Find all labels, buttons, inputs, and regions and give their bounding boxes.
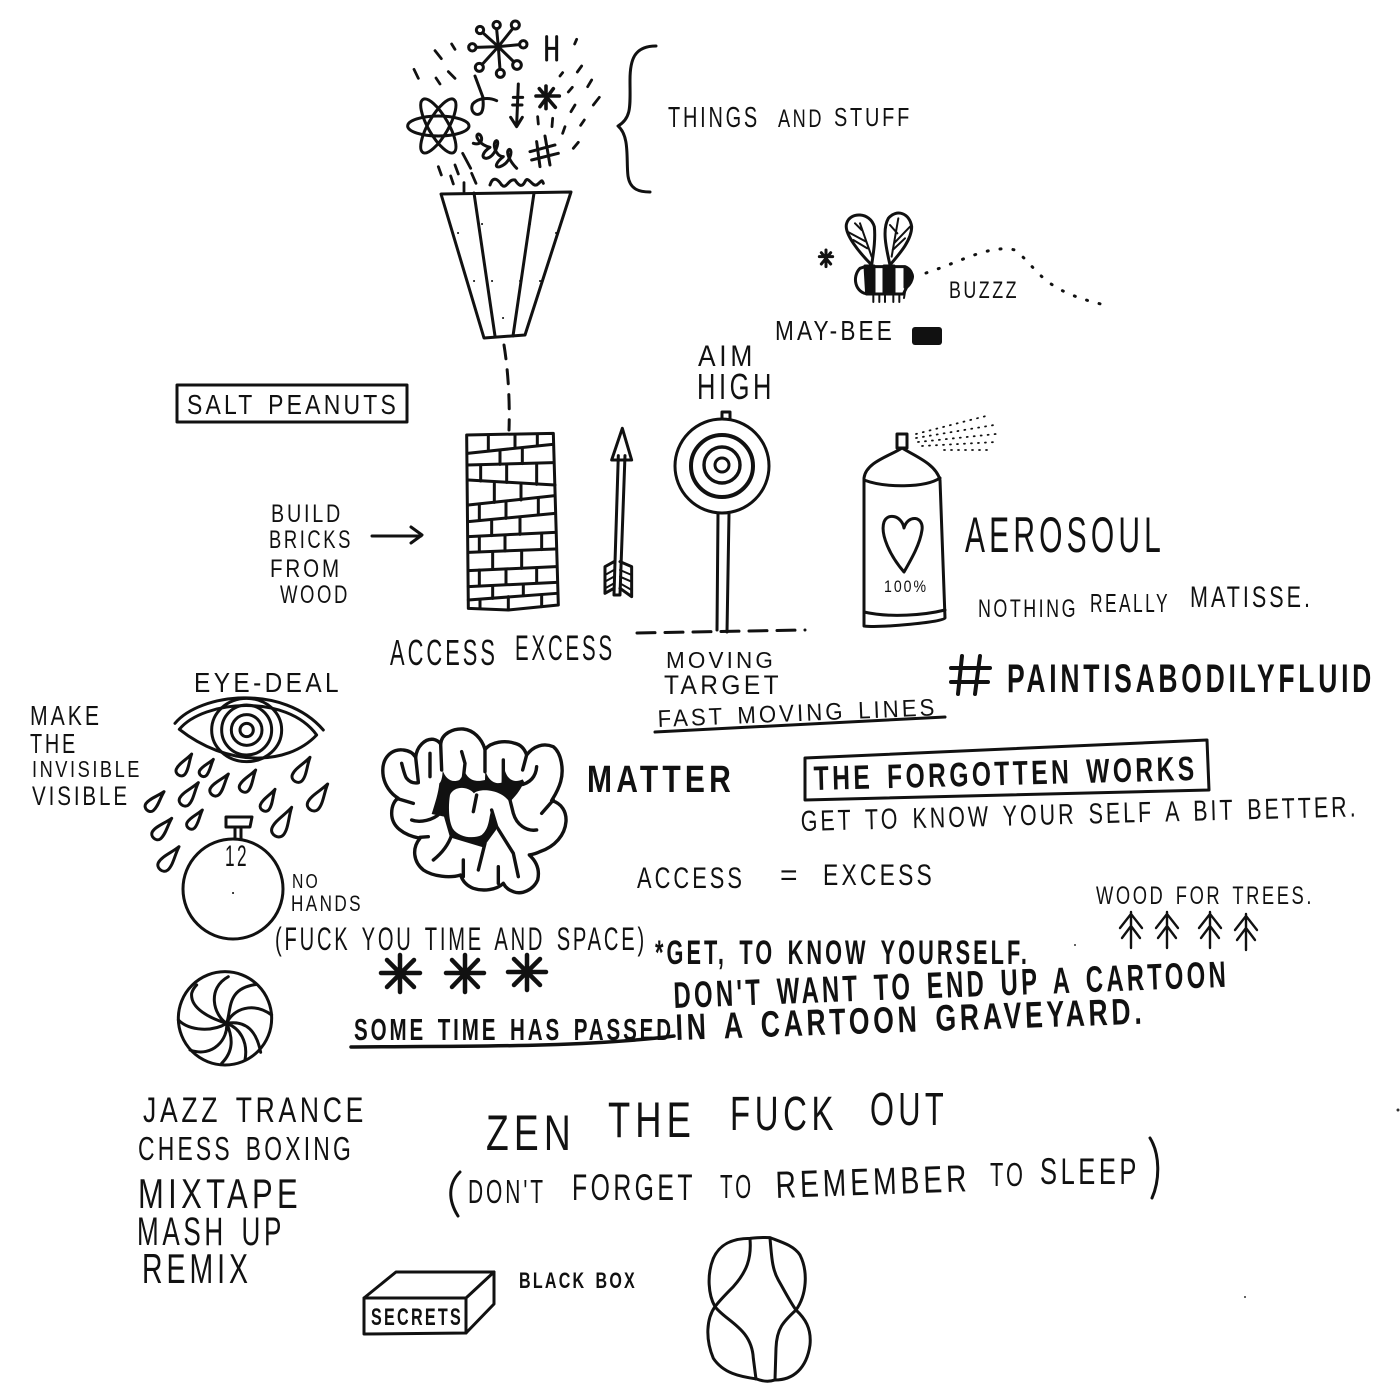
label: mixtape mash up remix <box>137 1170 302 1292</box>
label: mixtape mash up remix: MASH UP <box>137 1210 285 1254</box>
label: moving target: MOVING <box>666 647 776 673</box>
label: matter: MATTER <box>587 759 735 801</box>
label: black box: BLACK BOX <box>519 1268 637 1293</box>
label: don't forget to remember to sleep: TO <box>720 1168 754 1205</box>
label: aim high <box>697 340 775 407</box>
label: don't forget to remember to sleep <box>451 1138 1158 1216</box>
label: make the invisible visible: MAKE <box>30 700 102 731</box>
label: 100 percent: 100% <box>884 577 928 596</box>
label: build bricks from wood <box>269 500 353 609</box>
icon: hash <box>530 136 558 167</box>
label: zen the fuck out <box>486 1083 948 1161</box>
label: things and stuff: STUFF <box>834 102 912 132</box>
icon: brain matter <box>383 729 566 893</box>
icon: three asterisks <box>381 955 546 992</box>
falling dashes <box>414 39 599 192</box>
label: nothing really matisse: MATISSE. <box>1190 581 1313 614</box>
label: eye-deal: EYE-DEAL <box>194 667 342 698</box>
label: aim high: HIGH <box>697 366 775 407</box>
icon: asterisk <box>536 86 559 109</box>
label: may-bee: MAY-BEE <box>775 315 895 346</box>
label: nothing really matisse: REALLY <box>1090 588 1170 618</box>
label: moving target <box>664 647 782 700</box>
icon: atom flower <box>408 94 469 158</box>
icon: spray can <box>864 434 945 626</box>
spray mist <box>916 416 996 450</box>
icon: target on pole <box>675 412 769 632</box>
label: salt peanuts box: SALT PEANUTS <box>187 389 399 420</box>
label: aerosoul: AEROSOUL <box>965 507 1165 563</box>
black fold shadow <box>432 763 524 847</box>
icon: upward arrow <box>605 428 632 597</box>
label: access = excess <box>637 859 935 895</box>
label: no hands <box>291 871 363 916</box>
label: build bricks from wood: BRICKS <box>269 526 353 554</box>
label: fast moving lines: FAST MOVING LINES <box>657 694 938 733</box>
icon: eye with tears <box>143 698 333 874</box>
label: access = excess: EXCESS <box>823 859 935 892</box>
label: make the invisible visible: THE <box>30 728 78 759</box>
label: things and stuff: THINGS <box>668 102 760 134</box>
label: get to know yourself: *GET, TO KNOW YOURSELF. <box>655 934 1030 972</box>
icon: snowflake star <box>469 21 527 77</box>
icon: down arrow <box>511 84 523 127</box>
icon: squiggle <box>473 134 517 168</box>
label: nothing really matisse <box>978 581 1313 623</box>
icon: secrets black box <box>364 1272 494 1334</box>
label: mixtape mash up remix: REMIX <box>142 1245 252 1292</box>
label: nothing really matisse: NOTHING <box>978 595 1078 623</box>
label: moving target: TARGET <box>664 670 782 700</box>
label: access excess: EXCESS <box>515 629 615 668</box>
icon: stopwatch: 12 <box>225 840 249 873</box>
label: zen the fuck out: THE <box>608 1092 696 1148</box>
label: the forgotten works box <box>805 740 1209 800</box>
icon: spiral disc <box>178 972 272 1065</box>
label: no hands: NO <box>292 871 320 893</box>
letter H <box>547 37 557 60</box>
label: access excess: ACCESS <box>390 632 498 673</box>
label: jazz trance chess boxing <box>138 1091 367 1167</box>
icon: curly brace <box>618 46 656 192</box>
dashed connector <box>504 345 509 430</box>
label: make the invisible visible <box>30 700 142 811</box>
label: build bricks from wood: BUILD <box>271 500 343 528</box>
label: build bricks from wood: FROM <box>270 555 342 583</box>
icon: bee <box>819 213 913 302</box>
label: jazz trance chess boxing: CHESS BOXING <box>138 1130 354 1167</box>
label: make the invisible visible: INVISIBLE <box>32 756 142 782</box>
icon: figure eight in oval <box>708 1237 810 1381</box>
label: wood for trees: WOOD FOR TREES. <box>1096 882 1314 910</box>
label: aim high: AIM <box>698 340 756 373</box>
arrow: to the wall <box>372 527 422 543</box>
label: no hands: HANDS <box>291 891 363 916</box>
label: mixtape mash up remix: MIXTAPE <box>138 1170 302 1217</box>
label: make the invisible visible: VISIBLE <box>32 781 130 811</box>
bee flight path <box>926 249 1105 305</box>
label: access = excess: ACCESS <box>637 862 745 895</box>
label: access = excess: = <box>780 859 802 892</box>
label: zen the fuck out: OUT <box>870 1083 948 1135</box>
icon: funnel vase <box>441 192 571 338</box>
icon: stopwatch <box>183 817 283 939</box>
label: don't forget to remember to sleep: FORGET <box>572 1167 696 1208</box>
label: some time has passed <box>351 1012 674 1047</box>
label: don't forget to remember to sleep: TO <box>990 1156 1026 1193</box>
label: jazz trance chess boxing: JAZZ TRANCE <box>143 1091 367 1130</box>
ground line <box>637 630 805 633</box>
label: zen the fuck out: ZEN <box>486 1105 576 1161</box>
label: don't forget to remember to sleep: REMEMBER <box>775 1158 971 1207</box>
label: in a cartoon graveyard: IN A CARTOON GRAVEYARD. <box>675 991 1146 1048</box>
label: don't forget to remember to sleep: SLEEP <box>1040 1151 1140 1192</box>
icon: four trees <box>1120 912 1257 950</box>
icon: secrets black box: SECRETS <box>371 1304 463 1331</box>
label: fuck you time and space: (FUCK YOU TIME AND SPACE) <box>275 921 647 957</box>
label: things and stuff: AND <box>778 105 824 133</box>
label: things and stuff <box>668 102 912 134</box>
label: buzzz: BUZZZ <box>949 277 1019 304</box>
label: the forgotten works box: THE FORGOTTEN WORKS <box>813 750 1198 798</box>
icon: wave <box>490 179 543 186</box>
icon: note loop <box>472 76 497 114</box>
label: build bricks from wood: WOOD <box>280 581 350 609</box>
label: zen the fuck out: FUCK <box>730 1088 838 1141</box>
label: some time has passed: SOME TIME HAS PASSED <box>354 1012 674 1047</box>
icon: brick wall <box>467 433 558 610</box>
label: don't forget to remember to sleep: DON'T <box>468 1173 546 1210</box>
icon: exploding things and stuff symbols <box>408 21 599 192</box>
